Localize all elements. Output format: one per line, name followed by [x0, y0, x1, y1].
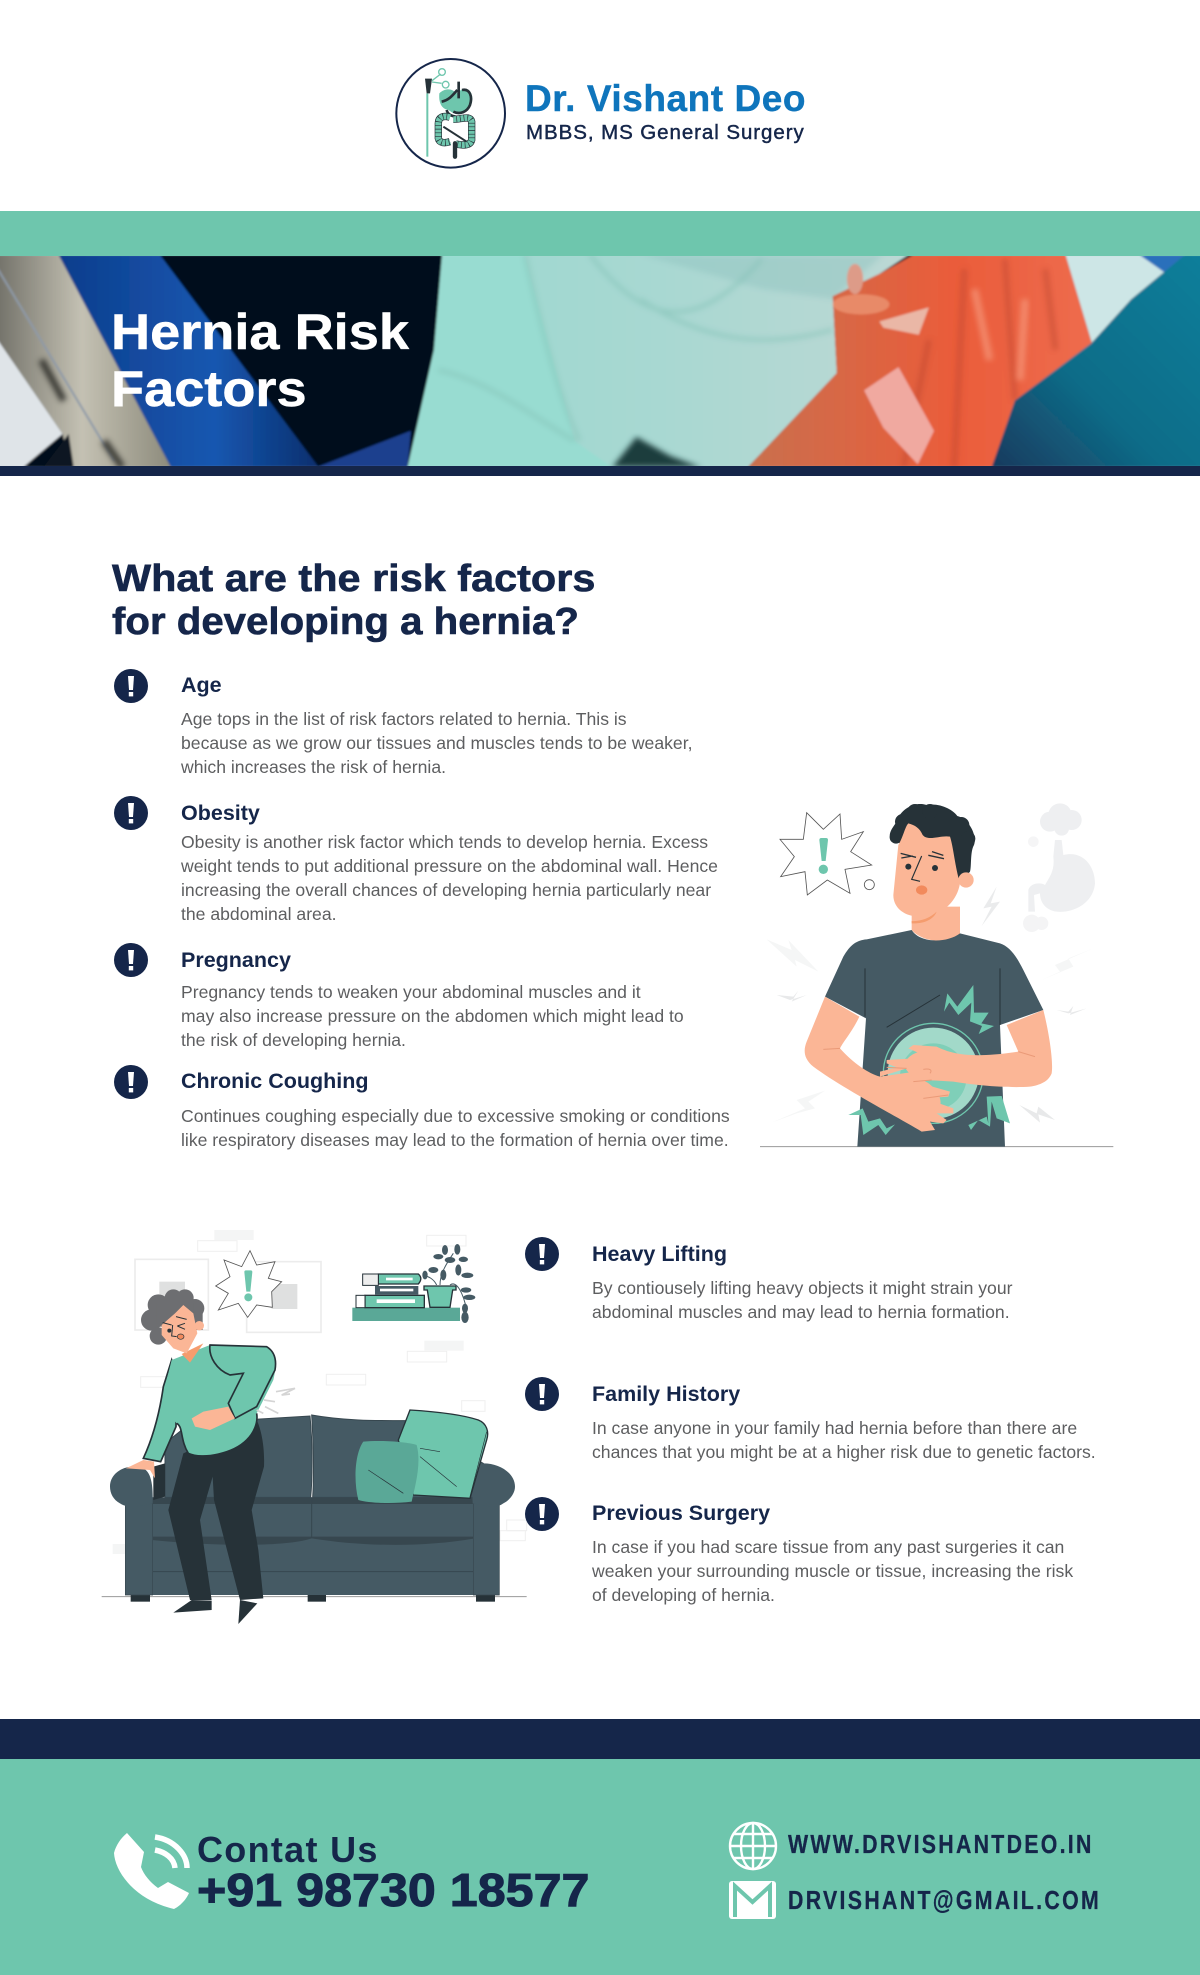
item title: Family History: [592, 1382, 740, 1406]
item title: Pregnancy: [181, 948, 291, 972]
item body: Continues coughing especially due to excessive smoking or conditions: [181, 1106, 730, 1126]
risk item: Previous Surgery: [525, 1497, 1074, 1605]
hero banner photo: [0, 256, 1200, 476]
website: WWW.DRVISHANTDEO.IN: [788, 1830, 1091, 1859]
hero title: [111, 304, 410, 417]
woman: [126, 1289, 295, 1624]
item body: the abdominal area.: [181, 904, 337, 924]
footer navy band: [0, 1719, 1200, 1759]
section heading: [112, 558, 595, 643]
item body: increasing the overall chances of developing hernia particularly near: [181, 880, 711, 900]
item body: In case anyone in your family had hernia before than there are: [592, 1418, 1077, 1438]
risk item: Obesity: [114, 796, 718, 924]
item body: of developing of hernia.: [592, 1585, 775, 1605]
exclamation speech burst: [216, 1251, 282, 1317]
head: [890, 804, 975, 941]
item body: Pregnancy tends to weaken your abdominal muscles and it: [181, 982, 641, 1002]
item title: Previous Surgery: [592, 1500, 770, 1524]
item body: weight tends to put additional pressure on the abdominal wall. Hence: [181, 856, 718, 876]
item body: In case if you had scare tissue from any past surgeries it can: [592, 1537, 1064, 1557]
risk item: Age: [114, 669, 692, 777]
risk item: Heavy Lifting: [525, 1237, 1012, 1322]
hero title: Hernia Risk: [111, 304, 409, 360]
cushions: [356, 1410, 488, 1503]
risk item: Family History: [525, 1377, 1096, 1462]
logo name: Dr. Vishant Deo: [525, 78, 806, 119]
item body: [181, 982, 684, 1050]
item body: because as we grow our tissues and muscles tends to be weaker,: [181, 733, 692, 753]
item body: By contiousely lifting heavy objects it might strain your: [592, 1278, 1012, 1298]
item body: abdominal muscles and may lead to hernia formation.: [592, 1302, 1010, 1322]
item title: Age: [181, 672, 222, 696]
logo emblem: digestive system in circle: [395, 58, 506, 169]
item body: [181, 1106, 730, 1150]
logo: [395, 58, 806, 169]
alert icon: [114, 943, 148, 977]
exclamation speech burst: [780, 813, 874, 895]
item body: Obesity is another risk factor which tends to develop hernia. Excess: [181, 832, 708, 852]
sofa: [102, 1415, 527, 1602]
item body: [592, 1418, 1096, 1462]
logo credentials: MBBS, MS General Surgery: [526, 121, 805, 144]
item body: chances that you might be at a higher risk due to genetic factors.: [592, 1442, 1096, 1462]
item body: which increases the risk of hernia.: [181, 757, 446, 777]
item body: Age tops in the list of risk factors related to hernia. This is: [181, 709, 627, 729]
arms and hands: [805, 997, 1052, 1132]
icon: globe: [728, 1822, 778, 1870]
icon: phone: [114, 1833, 190, 1909]
footer contact panel: [0, 1759, 1200, 1975]
shirt: [825, 930, 1043, 1147]
item body: [181, 832, 718, 924]
item body: weaken your surrounding muscle or tissue, increasing the risk: [592, 1561, 1073, 1581]
faint background pain bolts and stomach: [767, 803, 1095, 1123]
item body: like respiratory diseases may lead to the formation of hernia over time.: [181, 1130, 729, 1150]
item body: [181, 709, 692, 777]
hero title: Factors: [111, 361, 307, 417]
item body: may also increase pressure on the abdomen which might lead to: [181, 1006, 684, 1026]
alert icon: [114, 669, 148, 703]
section heading: for developing a hernia?: [112, 601, 579, 643]
item title: Heavy Lifting: [592, 1242, 727, 1266]
item title: Obesity: [181, 800, 260, 824]
illustration: woman on sofa holding back: [102, 1230, 527, 1624]
item body: [592, 1537, 1074, 1605]
section heading: What are the risk factors: [112, 558, 595, 600]
item body: the risk of developing hernia.: [181, 1030, 406, 1050]
risk item: Pregnancy: [114, 943, 684, 1050]
alert icon: [525, 1237, 559, 1271]
item body: [592, 1278, 1012, 1322]
phone number: +91 98730 18577: [197, 1864, 589, 1916]
ground line: [760, 1145, 1113, 1148]
shelf with books and plant: [352, 1244, 475, 1323]
item title: Chronic Coughing: [181, 1068, 368, 1092]
illustration: man holding stomach: [760, 804, 1114, 1148]
alert icon: [114, 796, 148, 830]
wall decor frames and bricks: [113, 1230, 527, 1554]
green band: [0, 211, 1200, 256]
alert icon: [525, 1377, 559, 1411]
alert icon: [525, 1497, 559, 1531]
contact heading: Contat Us: [197, 1829, 379, 1870]
risk item: Chronic Coughing: [114, 1065, 730, 1150]
glowing pain circle and bolts: [848, 985, 1010, 1135]
icon: mail: [729, 1881, 776, 1919]
alert icon: [114, 1065, 148, 1099]
